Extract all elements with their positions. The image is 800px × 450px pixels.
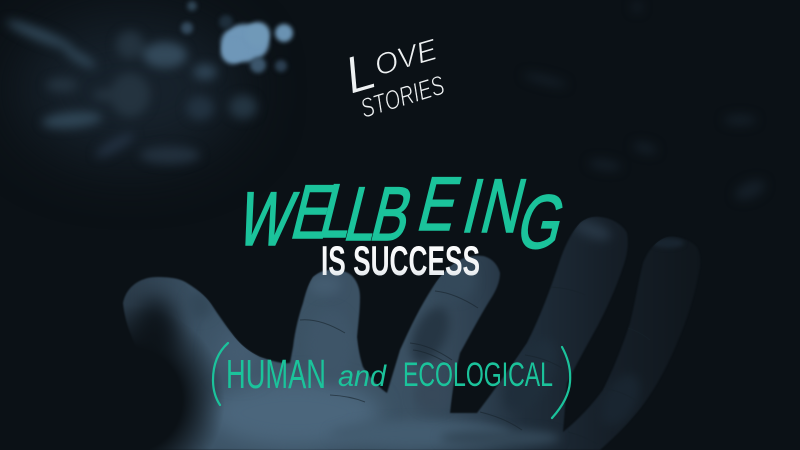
tagline: Human and Ecological: ECOLOGICAL — [403, 356, 553, 394]
logo: Love Stories — [338, 24, 448, 124]
subheading: Is Success: IS SUCCESS — [321, 237, 480, 284]
tagline: Human and Ecological: and — [338, 360, 387, 393]
finger creases — [300, 290, 552, 430]
logo word: Stories: STORIES — [357, 70, 448, 124]
tagline: Human and Ecological — [213, 343, 570, 418]
bright bokeh highlight — [181, 1, 293, 73]
wrist fading into shadow — [35, 305, 225, 450]
photo: open hand — [122, 216, 686, 450]
left parenthesis — [213, 343, 228, 405]
palm and finger shading — [133, 216, 684, 448]
logo word: Love: L — [338, 42, 382, 106]
logo word: Love: OVE — [371, 33, 442, 83]
heading: Wellbeing: WELLBEING — [230, 163, 578, 265]
tagline: Human and Ecological: HUMAN — [226, 351, 326, 397]
right parenthesis — [552, 347, 570, 418]
